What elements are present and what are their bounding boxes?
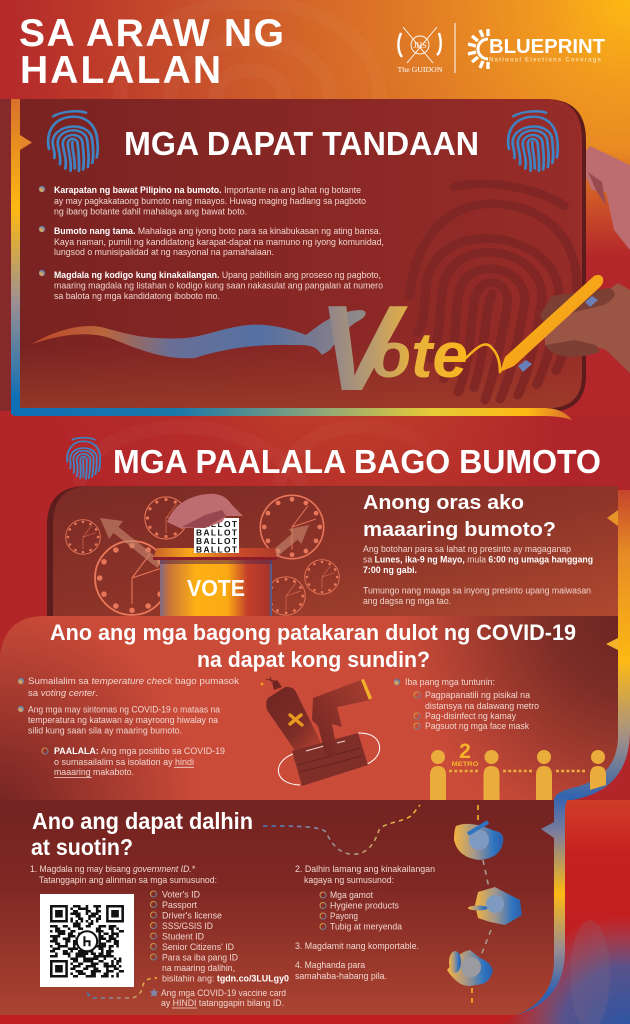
bullets: left: silid kung saan sila ay maaring bumoto. xyxy=(28,726,182,736)
panel background xyxy=(47,486,618,620)
list: accepted ids: Voter's ID xyxy=(162,890,200,900)
bullet 2 xyxy=(39,226,384,257)
bullet 3 xyxy=(39,270,383,301)
icon: hygiene products xyxy=(468,887,522,925)
clocks xyxy=(66,495,339,615)
bullets: right: Pagsuot ng mga face mask xyxy=(425,721,529,731)
panel: dapat dalhin xyxy=(0,794,572,1015)
logo divider xyxy=(454,23,456,73)
fingerprint: right xyxy=(505,109,560,174)
right gradient strip xyxy=(554,490,630,800)
bullet 3: sa balota ng mga kandidatong iboboto mo. xyxy=(54,291,220,301)
hand xyxy=(167,494,243,528)
panel background xyxy=(0,616,618,800)
qr code xyxy=(40,894,134,987)
title: HALALAN xyxy=(20,49,221,92)
heading: Ano ang mga bagong patakaran dulot ng COVID-19 xyxy=(50,620,576,645)
thermometer gun xyxy=(312,680,371,756)
list: accepted ids: Driver's license xyxy=(162,910,222,920)
cross mark xyxy=(290,715,302,725)
footer band xyxy=(0,1015,517,1024)
list: accepted ids: bisitahin ang: tgdn.co/3LULgy0 xyxy=(162,974,289,984)
bullet 3: maaring magdala ng listahan o kodigo kung saan nakasulat ang pangalan at numero xyxy=(54,280,383,290)
icon: medicine pouch xyxy=(454,822,503,860)
panel: mga dapat tandaan xyxy=(11,99,630,420)
bullets: left xyxy=(18,676,240,736)
list: accepted ids: Student ID xyxy=(162,932,204,942)
text: item 4 xyxy=(295,960,387,981)
callout: paalala: maaaring makaboto. xyxy=(54,767,134,777)
text: oras body: sa Lunes, ika-9 ng Mayo, mula 6:00 ng umaga hanggang xyxy=(363,554,593,564)
logo: Blueprint xyxy=(468,29,605,69)
text: item 2: Payong xyxy=(330,911,358,921)
text: oras body: 7:00 ng gabi. xyxy=(363,565,417,575)
background fingerprint pattern xyxy=(80,2,440,480)
hand with pen xyxy=(500,275,630,373)
text: oras body xyxy=(363,544,593,606)
logo: Blueprint: National Elections Coverage xyxy=(489,58,602,64)
bullets: right: distansya na dalawang metro xyxy=(425,701,539,711)
illustration: alcohol, thermometer, mask xyxy=(261,677,380,786)
bullet 3: Magdala ng kodigo kung kinakailangan. Upang pabilisin ang proseso ng pagboto, xyxy=(54,270,381,280)
panel background xyxy=(0,800,554,1015)
text: oras body: ang dagsa ng mga tao. xyxy=(363,596,451,606)
icon: umbrella and water xyxy=(447,950,493,986)
text: oras heading: maaaring bumoto? xyxy=(363,519,556,541)
heading: na dapat kong sundin? xyxy=(197,647,430,672)
panel background xyxy=(20,99,586,412)
bullet 2: Kaya naman, pumili ng kandidatong karapat-dapat na mamuno ng iyong komunidad, xyxy=(54,237,384,247)
ballot: BALLOT xyxy=(196,519,238,529)
text: item 2: Mga gamot xyxy=(330,890,373,900)
panel border xyxy=(11,99,572,420)
heading xyxy=(31,808,253,860)
dashed path: heading to icons xyxy=(263,805,420,854)
list: accepted ids: na maaring dalihin, xyxy=(162,963,235,973)
heading: at suotin? xyxy=(31,834,133,860)
logo: The Guidon: The GUIDON xyxy=(398,66,443,74)
bullet 2: lungsod o munisipalidad at ng nasyonal na pamahalaan. xyxy=(54,247,274,257)
bullets: right: Pag-disinfect ng kamay xyxy=(425,711,516,721)
fingerprint xyxy=(67,438,100,479)
bullet 1 xyxy=(39,185,366,216)
bullets: right xyxy=(394,677,539,731)
dashed path: qr to link xyxy=(87,978,157,998)
bullet 1: ng ibang botante dahil mahalaga ang bawat boto. xyxy=(54,206,247,216)
ballot box: VOTE xyxy=(187,575,245,601)
list: accepted ids: SSS/GSIS ID xyxy=(162,921,213,931)
section heading: mga paalala bago bumoto: MGA PAALALA BAGO BUMOTO xyxy=(113,443,601,480)
hand: top right xyxy=(578,146,630,250)
note: vaccine card xyxy=(149,988,286,1008)
text: oras heading: Anong oras ako xyxy=(363,492,524,514)
logo: The Guidon xyxy=(398,27,443,74)
dashed path: vertical xyxy=(472,805,491,1008)
title: SA ARAW NG xyxy=(19,12,284,55)
distancing figures: METRO xyxy=(452,761,478,768)
fingerprint: left xyxy=(45,109,100,174)
text: oras heading xyxy=(363,492,556,541)
ballot box xyxy=(153,548,277,616)
vote brush lettering: ote xyxy=(372,319,468,391)
text: item 4: samahaba-habang pila. xyxy=(295,971,387,981)
text: oras body: Ang botohan para sa lahat ng presinto ay magaganap xyxy=(363,544,571,554)
mask xyxy=(292,733,368,786)
logo: Blueprint: BLUEPRINT xyxy=(489,36,605,58)
bullets: left: Ang mga may sintomas ng COVID-19 o mataas na xyxy=(28,705,220,715)
text: item 2: 2. Dalhin lamang ang kinakailangan xyxy=(295,864,435,874)
text: item 2: Tubig at meryenda xyxy=(330,922,402,932)
alcohol bottle xyxy=(266,687,322,752)
right side colour field xyxy=(280,150,630,1024)
text: item 2: Hygiene products xyxy=(330,900,399,910)
text: item 2 xyxy=(295,864,435,932)
text: item 3: 3. Magdamit nang komportable. xyxy=(295,941,419,951)
note: vaccine card: Ang mga COVID-19 vaccine card xyxy=(161,988,286,998)
panel: covid-19 xyxy=(0,616,618,800)
left strip xyxy=(0,99,11,411)
distancing figures xyxy=(430,740,606,800)
list: accepted ids: Para sa iba pang ID xyxy=(162,952,238,962)
heading: MGA DAPAT TANDAAN xyxy=(124,125,479,162)
note: vaccine card: ay HINDI tatanggapin bilang ID. xyxy=(161,998,284,1008)
list: accepted ids: Senior Citizens' ID xyxy=(162,942,234,952)
vote brush lettering xyxy=(32,280,500,416)
bullets: left: Sumailalim sa temperature check bago pumasok xyxy=(28,676,240,686)
heading xyxy=(50,620,576,672)
bullet 1: ay may pagkakataong bumoto nang maayos. Huwag maging hadlang sa pagboto xyxy=(54,196,366,206)
bullets: right: Pagpapanatili ng pisikal na xyxy=(425,690,530,700)
arrows xyxy=(100,518,309,568)
bullets: left: sa voting center . xyxy=(28,688,98,698)
text: item 4: 4. Maghanda para xyxy=(295,960,365,970)
text: oras body: Tumungo nang maaga sa inyong presinto upang maiwasan xyxy=(363,586,591,596)
logos xyxy=(398,23,605,74)
bullets: left: temperatura ng katawan ay mayroong hiwalay na xyxy=(28,715,218,725)
text: item 1: 1. Magdala ng may bisang government ID.* xyxy=(30,864,195,874)
vote brush lettering: V xyxy=(318,280,408,416)
callout: paalala xyxy=(42,746,225,778)
title xyxy=(19,12,284,92)
bullet 1: Karapatan ng bawat Pilipino na bumoto. Importante na ang lahat ng botante xyxy=(54,185,361,195)
callout: paalala: o sumasailalim sa isolation ay hindi xyxy=(54,757,194,767)
ballot: BALLOT xyxy=(196,536,238,546)
big fingerprint xyxy=(405,180,582,404)
mask loops xyxy=(278,733,380,785)
callout: paalala: PAALALA: Ang mga positibo sa COVID-19 xyxy=(54,746,225,756)
ballot: BALLOT xyxy=(196,544,238,554)
bullets: right: Iba pang mga tuntunin: xyxy=(405,677,495,687)
panel: oras ng pagboto xyxy=(47,486,618,620)
distancing figures: 2 xyxy=(459,740,471,763)
text: item 2: kagaya ng sumusunod: xyxy=(304,875,394,885)
text: item 1: Tatanggapin ang alinman sa mga sumusunod: xyxy=(39,875,217,885)
list: accepted ids: Passport xyxy=(162,900,197,910)
logo: The Guidon: JHS xyxy=(413,41,427,50)
heading: Ano ang dapat dalhin xyxy=(32,808,253,834)
text: item 1 xyxy=(30,864,217,885)
ballot xyxy=(194,518,239,554)
ballot: BALLOT xyxy=(196,528,238,538)
list: accepted ids xyxy=(150,890,289,984)
panel border xyxy=(517,794,572,1015)
bullet 2: Bumoto nang tama. Mahalaga ang iyong boto para sa kinabukasan ng ating bansa. xyxy=(54,226,381,236)
